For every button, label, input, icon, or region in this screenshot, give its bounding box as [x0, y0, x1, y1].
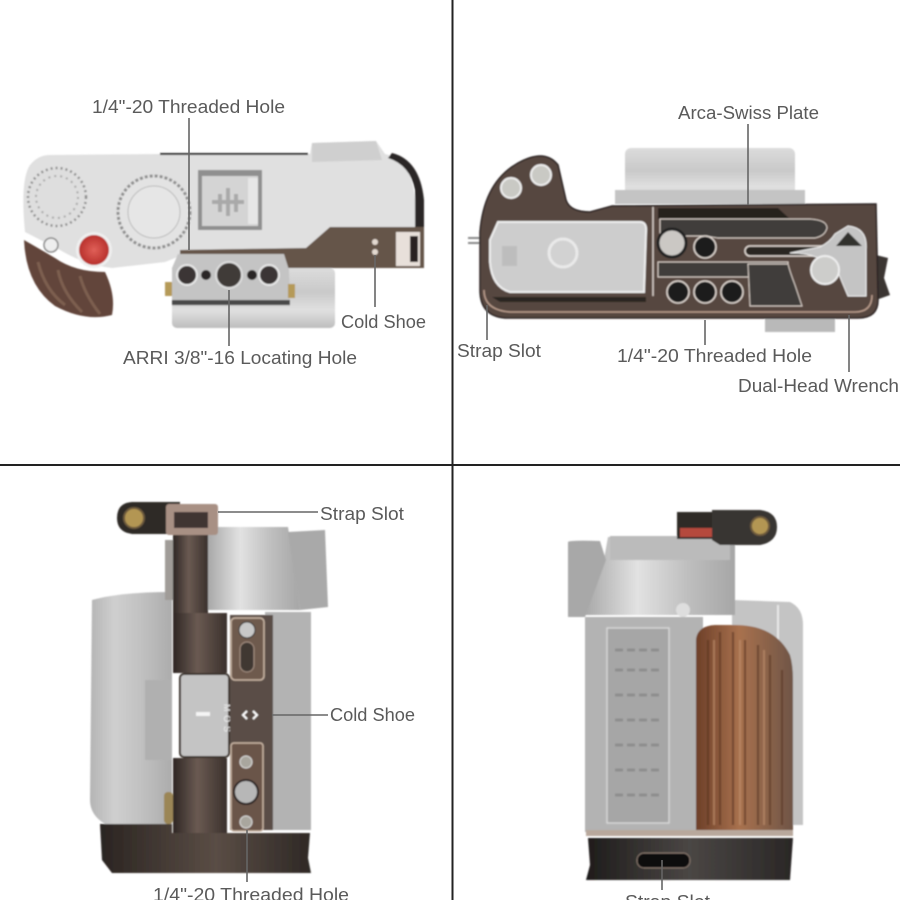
left dial	[28, 168, 86, 226]
panel: right side view of camera cage	[568, 510, 803, 900]
strap knob	[468, 238, 482, 243]
camera top plate	[23, 141, 415, 268]
hot shoe	[198, 170, 262, 230]
lens barrel	[625, 148, 795, 204]
strap loop	[166, 504, 218, 535]
camera top view illustration	[23, 141, 424, 328]
centre divider	[652, 207, 654, 296]
upper slot plate	[231, 618, 264, 680]
cage column lower	[173, 758, 227, 833]
round badge	[658, 229, 686, 257]
wooden grip	[696, 625, 793, 830]
top band	[610, 536, 730, 560]
eyecup	[568, 541, 606, 617]
plate rim highlight	[484, 290, 872, 312]
right dial	[118, 176, 190, 248]
panel: top view of camera cage	[23, 97, 426, 368]
camera top housing	[208, 527, 300, 610]
lens side	[90, 592, 172, 824]
viewfinder eyecup	[288, 530, 328, 610]
label: ARRI locating hole: ARRI 3/8"-16 Locating Hole	[123, 348, 357, 368]
lens side	[732, 600, 803, 825]
strap lug	[676, 603, 690, 617]
panel: bottom view of camera cage	[457, 103, 899, 396]
cage column upper	[173, 533, 208, 613]
label: threaded hole: 1/4"-20 Threaded Hole	[92, 97, 285, 117]
small round button	[44, 238, 58, 252]
label: arca-swiss plate: Arca-Swiss Plate	[678, 103, 819, 123]
cold shoe screw dots	[372, 239, 378, 245]
leader lines	[189, 118, 375, 346]
cage column middle	[173, 613, 227, 673]
brown plate middle	[230, 615, 273, 830]
leader lines	[218, 512, 328, 882]
selector window	[180, 674, 229, 757]
red shutter button	[76, 232, 112, 268]
three threaded holes	[667, 281, 689, 303]
left side illustration	[90, 502, 328, 873]
cage plate outline	[480, 156, 878, 318]
middle dark slot	[658, 262, 788, 277]
label: threaded hole: 1/4"-20 Threaded Hole	[617, 346, 812, 366]
brown cage plate	[180, 227, 424, 268]
bottom view illustration	[468, 148, 890, 332]
top mount	[677, 512, 722, 539]
viewfinder hump	[312, 141, 382, 162]
wooden grip	[24, 240, 113, 317]
label: cold shoe: Cold Shoe	[341, 312, 426, 332]
label: strap slot: Strap Slot	[457, 341, 541, 361]
door surround	[492, 297, 646, 302]
silver mount plate	[172, 254, 290, 306]
leather panel	[607, 628, 669, 823]
mount holes	[177, 265, 197, 285]
leader lines	[487, 124, 849, 372]
label: strap slot: Strap Slot	[320, 504, 404, 524]
gold side pin	[164, 792, 173, 824]
lens barrel	[172, 268, 335, 328]
strap arm	[117, 502, 180, 534]
lens foot	[765, 318, 835, 332]
battery door	[490, 222, 646, 292]
base grip	[100, 824, 311, 873]
base trim	[586, 830, 793, 836]
wrench	[790, 226, 866, 296]
right side illustration	[568, 510, 803, 880]
top hump	[585, 537, 735, 615]
label: dual-head wrench: Dual-Head Wrench	[738, 376, 899, 396]
upper threaded hole	[694, 236, 716, 258]
leader line	[661, 860, 663, 890]
camera body rear	[265, 612, 311, 830]
lower plate	[231, 743, 263, 831]
base slot	[637, 853, 690, 868]
base plate	[586, 838, 793, 880]
top plate black edge	[160, 153, 308, 155]
camera body	[585, 617, 703, 832]
arrow marks	[243, 711, 257, 719]
label: cold shoe: Cold Shoe	[330, 705, 415, 725]
long slot	[745, 246, 845, 256]
panel: left side view of camera cage	[90, 502, 415, 900]
grip screws	[501, 178, 521, 198]
MOS letters: M O S	[222, 704, 232, 732]
top dark slot	[658, 208, 790, 219]
lower dark slot	[748, 264, 802, 306]
gold pegs	[165, 282, 172, 296]
